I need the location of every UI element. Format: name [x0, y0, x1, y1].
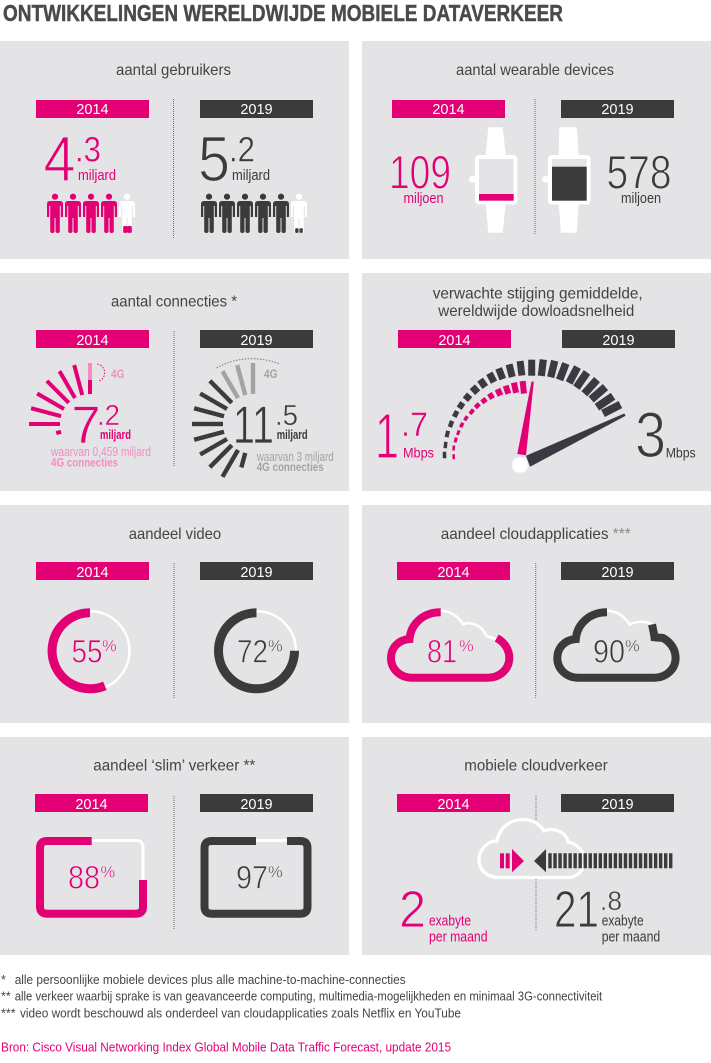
heading: mobiele cloudverkeer [464, 758, 608, 775]
year label 2019: 2019 [601, 102, 634, 118]
4G marker 2019: 4G [264, 367, 278, 381]
value 2 exabyte per maand [399, 881, 488, 946]
year label 2019 [561, 100, 674, 118]
note 2019 [256, 450, 334, 474]
gauge: pivot [512, 457, 528, 473]
year label 2014: 2014 [76, 102, 109, 118]
panel: aantal gebruikers [0, 41, 349, 259]
4G marker 2014: 4G [111, 367, 124, 381]
panel: aantal wearable devices [362, 41, 711, 259]
year label 2019 [561, 562, 674, 581]
gauge: outer dark scale [443, 359, 622, 458]
footnotes: * [1, 973, 6, 987]
value 2 exabyte per maand: per maand [429, 929, 488, 946]
gauge: needle 2014 [517, 382, 534, 455]
year label 2014 [36, 100, 149, 118]
footnotes: alle verkeer waarbij sprake is van geavanceerde computing, multimedia-mogelijkheden en minimaal 3G-connectiviteit [15, 990, 603, 1004]
footnotes: video wordt beschouwd als onderdeel van cloudapplicaties zoals Netflix en YouTube [20, 1006, 461, 1020]
heading: aandeel cloudapplicaties *** [441, 526, 631, 543]
value 7.2 miljard: 7 [72, 396, 100, 455]
year label 2019: 2019 [601, 565, 634, 581]
panel: aandeel cloudapplicaties [362, 505, 711, 723]
year label 2014 [36, 562, 149, 581]
value 21.8 exabyte per maand: .8 [600, 886, 622, 916]
heading: aantal gebruikers [116, 62, 231, 79]
value 97%: 97 [236, 859, 268, 895]
value 5.2 miljard: .2 [229, 131, 255, 170]
footnotes [1, 973, 603, 1020]
value 90%: % [625, 638, 640, 656]
value 81%: % [459, 638, 474, 656]
value 21.8 exabyte per maand: 21 [554, 881, 599, 939]
value 2 exabyte per maand: exabyte [429, 913, 471, 930]
value 7.2 miljard: .2 [97, 400, 120, 432]
value 11.5 miljard: miljard [277, 428, 308, 442]
value 11.5 miljard: 11 [233, 396, 274, 455]
value 7.2 miljard [72, 396, 131, 455]
arrow: 2014 traffic [500, 849, 524, 872]
value 7.2 miljard: miljard [100, 428, 131, 442]
year label 2019 [562, 330, 675, 349]
cloud chart 90% [557, 611, 676, 678]
value 3 Mbps: Mbps [666, 445, 696, 461]
heading: aandeel video [129, 526, 221, 543]
chart: radial ticks 2019 [192, 363, 255, 478]
value 1.7 Mbps: 1 [375, 400, 399, 472]
panel: aantal connecties [0, 273, 349, 491]
value 5.2 miljard: miljard [232, 167, 270, 184]
year label 2014 [36, 330, 149, 349]
footnotes: alle persoonlijke mobiele devices plus alle machine-to-machine-connecties [15, 973, 406, 987]
year label 2014 [392, 100, 505, 118]
value 21.8 exabyte per maand: exabyte [602, 913, 644, 930]
value 1.7 Mbps: Mbps [403, 445, 434, 461]
ring chart 72% [217, 611, 296, 690]
year label 2014: 2014 [76, 565, 109, 581]
chart: radial ticks 2014 [29, 363, 92, 435]
value 55%: % [102, 638, 117, 656]
title: ONTWIKKELINGEN WERELDWIJDE MOBIELE DATAVERKEER [3, 0, 563, 26]
heading: aandeel ‘slim’ verkeer ** [93, 758, 255, 775]
year label 2019 [200, 330, 313, 349]
icon: people 2014 [47, 194, 135, 233]
value 5.2 miljard: 5 [198, 123, 230, 195]
panel: aandeel video [0, 505, 349, 723]
value 4.3 miljard [44, 123, 116, 195]
panel: aandeel slim verkeer [0, 737, 349, 955]
year label 2019: 2019 [602, 333, 635, 349]
year label 2019: 2019 [240, 797, 273, 813]
value 4.3 miljard: 4 [44, 123, 76, 195]
rounded frame chart 88% [40, 840, 143, 914]
value 55%: 55 [72, 634, 102, 670]
note 2014: 4G connecties [51, 456, 118, 470]
year label 2014 [398, 330, 511, 349]
year label 2014: 2014 [438, 333, 471, 349]
value 2 exabyte per maand: 2 [399, 881, 426, 939]
gauge: needle 2019 [526, 414, 626, 467]
value 81%: 81 [427, 634, 457, 670]
year label 2014 [397, 562, 510, 581]
value 97%: % [268, 863, 283, 881]
year label 2019: 2019 [240, 333, 273, 349]
4G marker 2019 [216, 359, 279, 381]
value 21.8 exabyte per maand [554, 881, 660, 946]
icon: watch 2014 [469, 127, 516, 233]
year label 2014: 2014 [437, 565, 470, 581]
year label 2019: 2019 [240, 565, 273, 581]
panel: downloadsnelheid [362, 273, 711, 491]
year label 2014: 2014 [432, 102, 465, 118]
value 109 miljoen: 109 [389, 146, 451, 198]
heading: aantal wearable devices [456, 62, 614, 79]
panel: mobiele cloudverkeer [362, 737, 711, 955]
value 88%: 88 [68, 859, 100, 895]
4G marker 2014 [98, 364, 124, 382]
arrow: 2019 traffic [534, 849, 674, 872]
value 578 miljoen: miljoen [621, 190, 661, 207]
icon: cloud outline [479, 820, 584, 878]
year label 2014: 2014 [437, 797, 470, 813]
year label 2019 [561, 794, 674, 813]
value 578 miljoen: 578 [606, 146, 672, 198]
year label 2014 [35, 794, 148, 813]
heading: verwachte stijging gemiddelde, [433, 285, 643, 302]
gauge: inner pink scale [452, 381, 527, 459]
note 2019: waarvan 3 miljard [256, 450, 334, 464]
value 72%: % [268, 638, 283, 656]
year label 2019 [200, 562, 313, 581]
note 2014 [50, 445, 151, 470]
value 88%: % [100, 863, 116, 881]
year label 2014 [397, 794, 510, 813]
footnotes: *** [1, 1006, 16, 1020]
heading: aantal connecties * [111, 294, 237, 311]
footnotes: ** [1, 990, 11, 1004]
value 4.3 miljard: miljard [78, 167, 116, 184]
year label 2019: 2019 [601, 797, 634, 813]
year label 2014: 2014 [75, 797, 108, 813]
rounded frame chart 97% [204, 840, 308, 914]
value 3 Mbps: 3 [635, 399, 666, 471]
value 4.3 miljard: .3 [75, 131, 101, 170]
heading [433, 285, 643, 320]
year label 2019 [200, 100, 313, 118]
ring chart 55% [50, 611, 130, 690]
value 72%: 72 [237, 634, 268, 670]
note 2019: 4G connecties [257, 460, 324, 474]
value 5.2 miljard [198, 123, 270, 195]
value 1.7 Mbps [375, 400, 434, 472]
cloud chart 81% [391, 611, 509, 678]
source line: Bron: Cisco Visual Networking Index Global Mobile Data Traffic Forecast, update 2015 [1, 1040, 451, 1055]
year label 2019 [200, 794, 313, 813]
value 21.8 exabyte per maand: per maand [602, 929, 660, 946]
value 11.5 miljard: .5 [275, 400, 298, 432]
value 90%: 90 [593, 634, 625, 670]
value 109 miljoen: miljoen [404, 190, 444, 207]
icon: watch 2019 [542, 127, 588, 233]
value 3 Mbps [635, 399, 696, 471]
year label 2019: 2019 [240, 102, 273, 118]
year label 2014: 2014 [76, 333, 109, 349]
note 2014: waarvan 0,459 miljard [50, 445, 151, 459]
value 1.7 Mbps: .7 [401, 406, 428, 444]
heading: wereldwijde dowloadsnelheid [437, 303, 634, 320]
icon: people 2019 [201, 194, 307, 233]
